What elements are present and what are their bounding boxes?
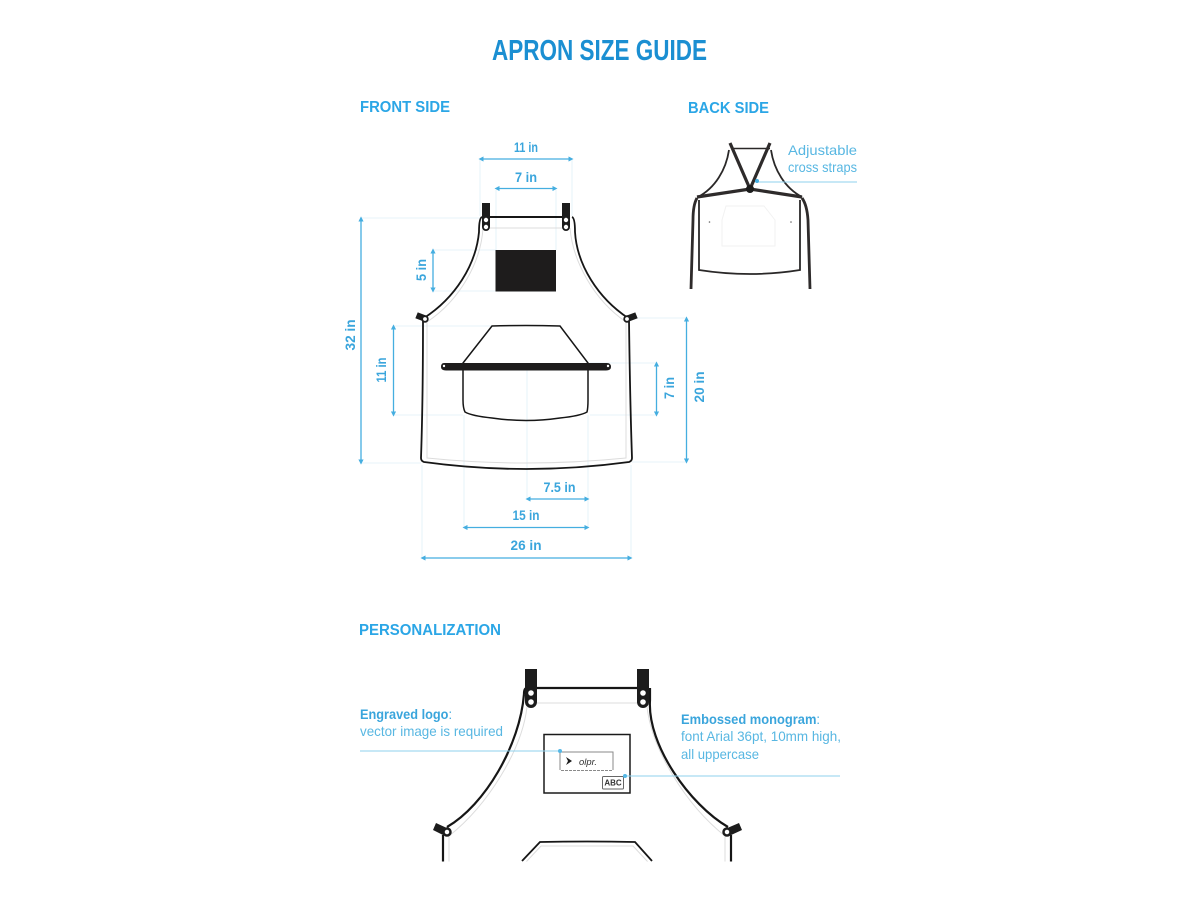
dimension: 32 in: 32 in — [342, 320, 358, 350]
dimension: 15 in — [465, 507, 587, 528]
dimension: 7 in pocket — [656, 364, 677, 414]
right neck tab — [637, 669, 649, 708]
callout text: cross straps — [788, 159, 857, 175]
crossed straps — [697, 143, 802, 197]
engraved logo text: Engraved logo: — [360, 706, 452, 722]
right waist loop — [624, 313, 637, 322]
heading: back side: BACK SIDE — [688, 100, 769, 117]
hanging ties — [691, 198, 810, 289]
heading: front side: FRONT SIDE — [360, 99, 450, 116]
embossed monogram text: all uppercase — [681, 746, 759, 762]
back apron diagram — [691, 142, 857, 289]
monogram patch — [496, 250, 556, 292]
logo plate: olpr. — [579, 757, 597, 767]
dimension: 5 in: 5 in — [413, 259, 429, 281]
engraved logo leader — [360, 749, 562, 753]
left neck tab — [482, 203, 490, 231]
embossed monogram text: Embossed monogram: — [681, 711, 820, 727]
faint pocket — [722, 206, 775, 246]
callout text — [788, 142, 857, 175]
left waist loop — [433, 823, 450, 836]
dimension: 7.5 in: 7.5 in — [544, 479, 576, 495]
embossed monogram text — [681, 711, 841, 762]
dimension: 11 in pocket height — [373, 327, 394, 414]
right waist loop — [724, 823, 742, 836]
dimension: 7 in patch — [497, 169, 555, 188]
back outline — [698, 150, 802, 274]
heading: personalization: PERSONALIZATION — [359, 622, 501, 639]
buckle — [746, 185, 754, 193]
neck strap bar — [482, 216, 570, 218]
dimension: 7.5 in — [528, 479, 587, 499]
dimension: 26 in: 26 in — [510, 537, 542, 553]
dimension: 11 in neck — [481, 139, 571, 159]
dimension: 11 in pocket height: 11 in — [373, 358, 389, 382]
title: APRON SIZE GUIDE — [492, 35, 707, 67]
dimension: 7 in patch: 7 in — [515, 169, 537, 185]
dimension: 5 in — [413, 251, 433, 290]
right neck tab — [562, 203, 570, 231]
monogram stamp — [602, 776, 624, 789]
stitching — [449, 703, 725, 862]
dimension: 7 in pocket: 7 in — [661, 377, 677, 399]
stitching — [427, 228, 626, 463]
dimension: 20 in: 20 in — [691, 372, 707, 402]
engraved logo text: vector image is required — [360, 723, 503, 739]
left neck tab — [525, 669, 537, 708]
front pocket — [463, 326, 588, 420]
apron outline — [443, 688, 731, 862]
engraved logo text — [360, 706, 503, 739]
apron outline — [421, 217, 632, 469]
top bar — [731, 148, 770, 150]
logo plate — [560, 752, 613, 770]
dimension: 11 in neck: 11 in — [514, 139, 538, 155]
monogram leader — [623, 774, 840, 778]
embossed monogram text: font Arial 36pt, 10mm high, — [681, 728, 841, 744]
callout leader — [757, 181, 857, 183]
monogram stamp: ABC — [604, 778, 622, 788]
front apron diagram — [342, 139, 707, 558]
pocket top — [522, 842, 652, 861]
dimension: 15 in: 15 in — [512, 507, 540, 523]
pocket band — [441, 363, 611, 370]
personalization apron diagram — [433, 669, 742, 862]
leather patch — [544, 734, 630, 793]
callout text: Adjustable — [788, 142, 857, 158]
left waist loop — [416, 313, 428, 322]
